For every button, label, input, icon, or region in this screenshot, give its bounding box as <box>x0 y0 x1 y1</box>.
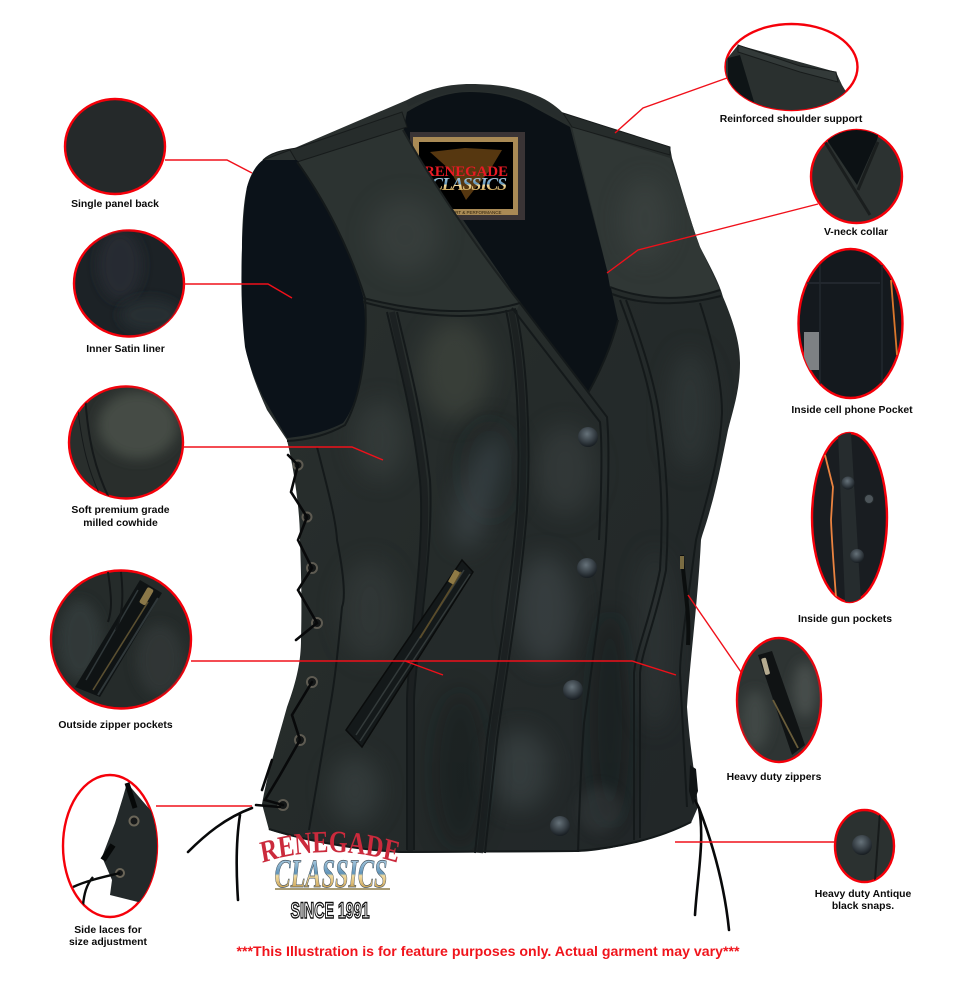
vest illustration <box>188 84 740 930</box>
label: Inner Satin liner <box>86 344 165 355</box>
label: Inside gun pockets <box>798 614 892 625</box>
leather shading <box>329 320 712 850</box>
zipper pocket <box>346 560 473 747</box>
front snaps <box>550 427 598 836</box>
callout: inside gun pockets <box>798 433 892 625</box>
label: Single panel back <box>71 199 159 210</box>
label: Outside zipper pockets <box>58 720 173 731</box>
right side zipper <box>680 555 688 645</box>
label line 2: milled cowhide <box>83 518 158 529</box>
label line 2: size adjustment <box>69 937 148 948</box>
logo wordmark: Renegade: RENEGADE <box>259 832 400 863</box>
callout: single panel back <box>65 99 252 210</box>
callout: inner satin liner <box>74 230 292 355</box>
disclaimer: ***This Illustration is for feature purposes only. Actual garment may vary*** <box>236 944 740 959</box>
logo underline <box>275 888 390 890</box>
label line 2: black snaps. <box>832 901 894 912</box>
left lapel panel <box>297 128 520 314</box>
armhole lining <box>241 160 366 438</box>
collar label: RENEGADE <box>424 164 508 180</box>
right lace ends <box>695 800 729 930</box>
callout: soft cowhide <box>69 386 383 529</box>
brand logo <box>259 832 400 923</box>
label: Side laces for <box>74 925 142 936</box>
callout: outside zipper pockets <box>51 570 676 731</box>
callout: inside cell phone pocket <box>791 249 913 416</box>
callout: v-neck collar <box>607 128 902 273</box>
callout: heavy duty zippers <box>688 595 822 783</box>
collar label: CLASSICS <box>431 174 507 194</box>
left lace ends <box>188 808 252 900</box>
collar label <box>410 132 525 220</box>
left shoulder strap <box>263 112 407 162</box>
label: Inside cell phone Pocket <box>791 405 913 416</box>
vest body silhouette <box>242 84 740 853</box>
yoke and panel seams <box>269 162 722 853</box>
label: Heavy duty zippers <box>727 772 822 783</box>
collar and neck interior <box>403 92 618 393</box>
callout: antique snaps <box>675 810 912 912</box>
side lacing <box>188 455 729 930</box>
label: Reinforced shoulder support <box>720 114 863 125</box>
logo wordmark: Classics: CLASSICS <box>274 851 388 896</box>
logo since text: SINCE 1991 <box>290 898 370 923</box>
callout: reinforced shoulder <box>615 24 863 133</box>
right shoulder panel <box>572 127 720 298</box>
callout: side laces <box>63 775 252 948</box>
label: Soft premium grade <box>71 505 170 516</box>
collar label: COMFORT & PERFORMANCE <box>438 210 502 215</box>
label: Heavy duty Antique <box>815 889 912 900</box>
label: V-neck collar <box>824 227 888 238</box>
